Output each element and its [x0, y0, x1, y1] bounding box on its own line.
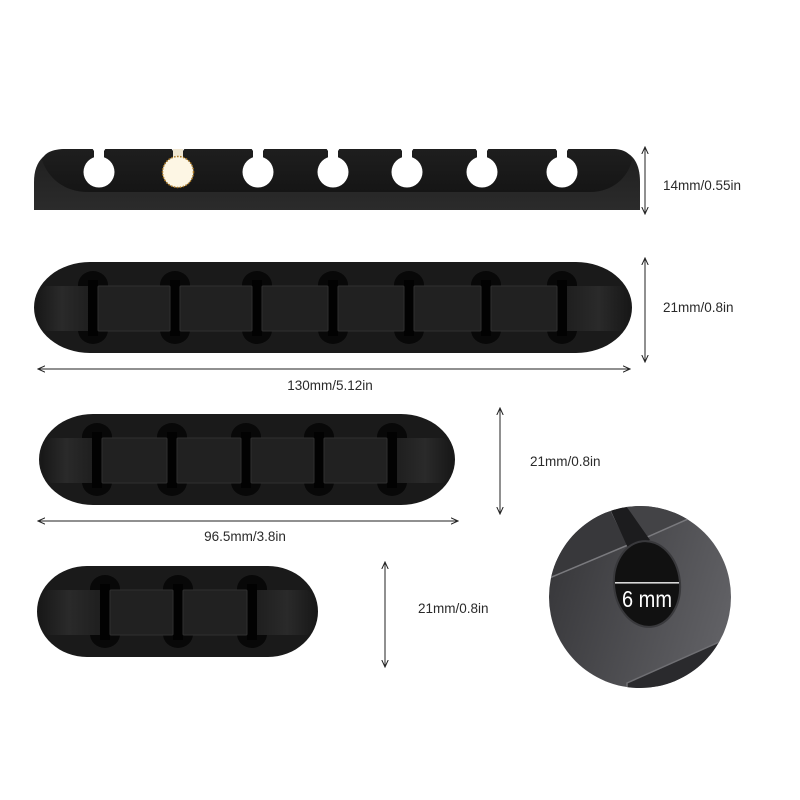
- arrow: 21mm height long bar: [644, 258, 646, 362]
- holes with slots: [84, 148, 578, 188]
- detail circle: 6 mm hole: [549, 506, 731, 688]
- arrow: 14mm height: [644, 147, 646, 214]
- label: 14mm: 14mm/0.55in: [663, 178, 741, 193]
- label: 21mm long bar: 21mm/0.8in: [663, 300, 734, 315]
- product: top view 3-slot organizer: [37, 566, 318, 657]
- product: top view 7-slot organizer: [34, 262, 632, 353]
- 6 mm dimension line: [615, 582, 679, 584]
- arrow: 130mm width: [38, 368, 630, 370]
- gold highlighted hole: [162, 148, 194, 188]
- arrow: 21mm height medium bar: [499, 408, 501, 514]
- label: 130mm: 130mm/5.12in: [287, 378, 373, 393]
- product: top view 5-slot organizer: [39, 414, 455, 505]
- infographic canvas: [34, 146, 740, 688]
- 6 mm label: 6 mm: [622, 586, 672, 612]
- label: 21mm medium bar: 21mm/0.8in: [530, 454, 601, 469]
- label: 96.5mm: 96.5mm/3.8in: [204, 529, 286, 544]
- product: side view 7-slot organizer: [34, 148, 640, 210]
- label: 21mm short bar: 21mm/0.8in: [418, 601, 489, 616]
- arrow: 21mm height short bar: [384, 562, 386, 667]
- arrow: 96.5mm width: [38, 520, 458, 522]
